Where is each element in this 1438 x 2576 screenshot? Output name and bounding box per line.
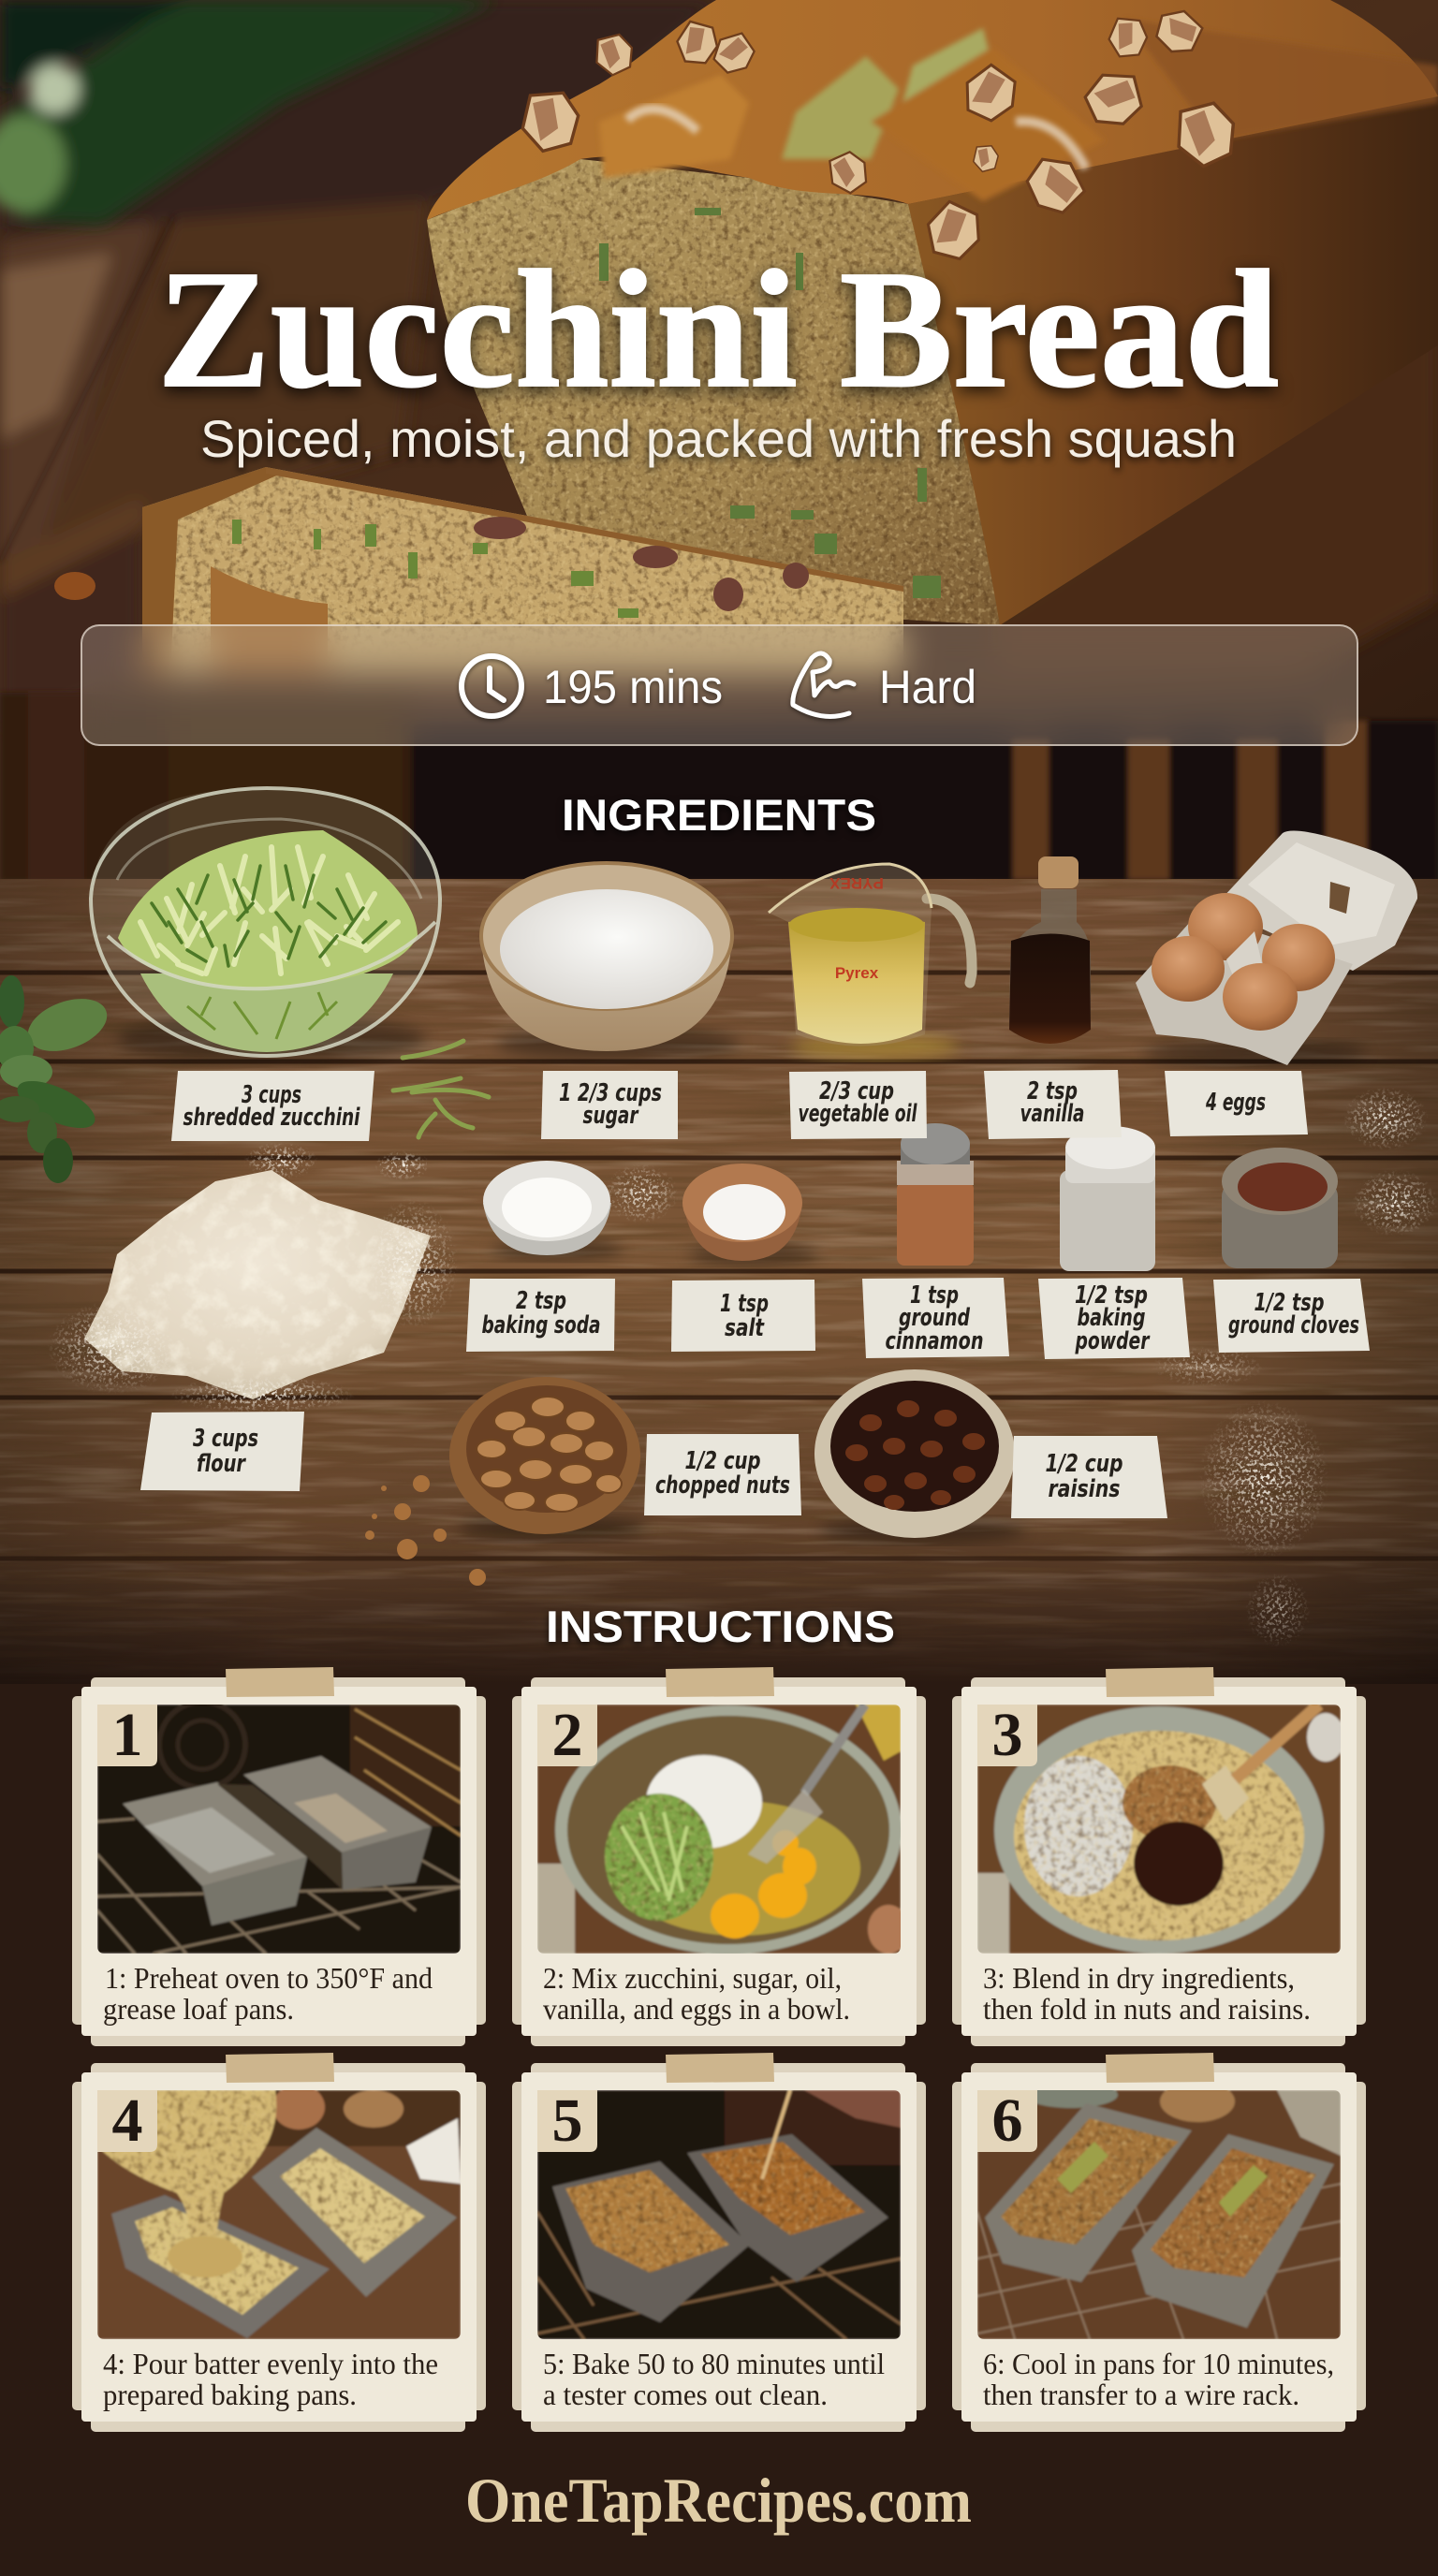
label: ground cinnamon — [862, 1278, 1009, 1358]
caption — [103, 1961, 433, 2026]
tape — [226, 2053, 334, 2083]
ingredient: sugar bowl — [481, 863, 740, 1061]
label: shredded zucchini — [171, 1071, 374, 1141]
number badge: 1 — [112, 1701, 142, 1769]
caption: 4: Pour batter evenly into the — [103, 2347, 438, 2380]
label: baking powder: baking — [1077, 1304, 1146, 1332]
label: salt — [671, 1280, 815, 1352]
card 4 — [72, 2053, 486, 2432]
label: sugar: sugar — [582, 1102, 639, 1130]
ingredient: ground cloves tin — [1222, 1148, 1338, 1268]
label: chopped nuts: 1/2 cup — [685, 1447, 760, 1475]
label: ground cinnamon: cinnamon — [886, 1327, 983, 1355]
ingredient: shredded zucchini bowl — [91, 788, 440, 1063]
title: Zucchini Bread — [157, 236, 1279, 422]
label: vegetable oil: vegetable oil — [798, 1100, 917, 1128]
card 5 — [512, 2053, 926, 2432]
label: vegetable oil — [789, 1071, 927, 1139]
label: raisins: raisins — [1049, 1475, 1121, 1503]
ingredient: flour pile — [47, 1170, 459, 1413]
label: raisins: 1/2 cup — [1045, 1450, 1123, 1478]
zucchini below rim — [140, 973, 393, 1052]
heading: ingredients: INGREDIENTS — [562, 790, 876, 840]
tape — [1106, 2053, 1214, 2083]
caption: then fold in nuts and raisins. — [983, 1992, 1311, 2026]
caption: 5: Bake 50 to 80 minutes until — [543, 2347, 885, 2380]
label: ground cinnamon: 1 tsp — [910, 1281, 959, 1310]
label: baking powder — [1038, 1278, 1190, 1359]
photo: mixing bowl with zucchini and eggs — [537, 1705, 901, 1954]
photo: loaves baking with tester — [537, 2090, 901, 2339]
loaf side crust — [908, 96, 1438, 625]
loaf crumb face — [427, 159, 1000, 625]
hero photo: zucchini bread loaf on wooden board — [0, 0, 1438, 882]
caption — [543, 1961, 850, 2026]
time text: 195 mins — [543, 661, 723, 713]
number badge — [97, 1701, 157, 1769]
caption: prepared baking pans. — [103, 2378, 357, 2411]
label: ground cloves — [1213, 1279, 1370, 1353]
icon: clock — [462, 656, 521, 716]
number badge — [977, 1701, 1037, 1769]
card 1 — [72, 1667, 486, 2046]
dark room behind table with chair spindles — [0, 693, 1438, 882]
number badge: 4 — [112, 2086, 142, 2155]
difficulty text: Hard — [879, 661, 976, 713]
ingredient: oil measuring jug: Pyrex — [835, 964, 879, 982]
caption: 1: Preheat oven to 350°F and — [105, 1961, 433, 1995]
label: salt: 1 tsp — [720, 1290, 769, 1318]
number badge — [537, 2086, 597, 2155]
caption — [983, 2347, 1334, 2411]
number badge — [97, 2086, 157, 2155]
caption: a tester comes out clean. — [543, 2378, 828, 2411]
caption: 6: Cool in pans for 10 minutes, — [983, 2347, 1334, 2380]
caption: 3: Blend in dry ingredients, — [983, 1961, 1295, 1995]
caption: then transfer to a wire rack. — [983, 2378, 1299, 2411]
label: flour: flour — [197, 1450, 246, 1478]
card 6 — [952, 2053, 1366, 2432]
label: ground cloves: ground cloves — [1228, 1311, 1359, 1339]
label: shredded zucchini: shredded zucchini — [183, 1104, 360, 1132]
label: flour — [140, 1412, 304, 1491]
subtitle: Spiced, moist, and packed with fresh squash — [200, 409, 1237, 468]
ingredient: chopped nuts bowl — [365, 1377, 646, 1586]
caption — [543, 2347, 885, 2411]
label: salt: salt — [725, 1314, 765, 1342]
ingredient: raisins bowl — [814, 1369, 1025, 1544]
number badge: 3 — [992, 1701, 1022, 1769]
label: vegetable oil: 2/3 cup — [819, 1077, 894, 1105]
label: ground cinnamon: ground — [899, 1304, 970, 1332]
number badge: 2 — [552, 1701, 582, 1769]
nuts on loaf — [522, 3, 1240, 269]
caption: 2: Mix zucchini, sugar, oil, — [543, 1961, 842, 1995]
label: shredded zucchini: 3 cups — [242, 1081, 301, 1109]
caption: vanilla, and eggs in a bowl. — [543, 1992, 850, 2026]
ingredient: oil measuring jug: PYREX — [829, 874, 884, 892]
number badge — [537, 1701, 597, 1769]
heading: instructions: INSTRUCTIONS — [546, 1602, 895, 1651]
label: eggs: 4 eggs — [1205, 1089, 1266, 1117]
number badge: 5 — [552, 2086, 582, 2155]
icon: flexed arm — [793, 653, 854, 716]
tape — [226, 1667, 334, 1697]
label: ground cloves: 1/2 tsp — [1255, 1289, 1324, 1317]
tape — [666, 1667, 774, 1697]
caption — [103, 2347, 438, 2411]
label: baking soda — [466, 1279, 615, 1352]
number badge: 6 — [992, 2086, 1022, 2155]
ingredient: cinnamon jar — [897, 1123, 974, 1266]
zucchini, blurred — [0, 0, 496, 225]
ingredient: baking powder jar — [1060, 1126, 1155, 1271]
tape — [666, 2053, 774, 2083]
card 2 — [512, 1667, 926, 2046]
ingredient: vanilla bottle — [1009, 856, 1091, 1044]
photo: folding in nuts and raisins — [977, 1705, 1341, 1954]
bread slice — [54, 467, 903, 674]
label: baking soda: 2 tsp — [516, 1287, 566, 1315]
footer website: OneTapRecipes.com — [465, 2465, 972, 2536]
label: raisins — [1011, 1436, 1167, 1518]
caption: grease loaf pans. — [103, 1992, 294, 2026]
label: sugar: 1 2/3 cups — [559, 1079, 662, 1107]
label: baking powder: powder — [1075, 1327, 1151, 1355]
ingredient: oil measuring jug — [769, 864, 972, 1060]
label: chopped nuts — [644, 1434, 801, 1515]
label: baking powder: 1/2 tsp — [1075, 1281, 1148, 1310]
photo: pans in oven — [97, 1705, 461, 1954]
ingredient: salt bowl — [682, 1164, 819, 1266]
label: vanilla: 2 tsp — [1027, 1077, 1078, 1105]
photo: loaves cooling on wire rack — [977, 2090, 1341, 2339]
loaf top crust — [427, 0, 1438, 220]
ingredient labels — [140, 1070, 1370, 1518]
zucchini mound — [118, 830, 418, 988]
label: vanilla: vanilla — [1020, 1100, 1084, 1128]
wooden ingredient table — [0, 879, 1438, 1684]
label: sugar — [541, 1071, 678, 1139]
label: eggs — [1165, 1071, 1308, 1136]
label: vanilla — [984, 1070, 1122, 1139]
number badge — [977, 2086, 1037, 2155]
glass rim — [91, 788, 440, 1056]
time and difficulty bar — [81, 624, 1358, 746]
label: chopped nuts: chopped nuts — [655, 1471, 790, 1500]
ingredient: parsley leaves — [0, 975, 114, 1183]
photo: pouring batter into pans — [97, 2090, 461, 2339]
loose zucchini shreds — [393, 1041, 489, 1137]
card 3 — [952, 1667, 1366, 2046]
ingredient: baking soda bowl — [483, 1161, 623, 1261]
ingredient: eggs in carton — [1136, 831, 1417, 1066]
caption — [983, 1961, 1311, 2026]
tape — [1106, 1667, 1214, 1697]
label: flour: 3 cups — [193, 1425, 258, 1453]
label: baking soda: baking soda — [481, 1311, 601, 1339]
